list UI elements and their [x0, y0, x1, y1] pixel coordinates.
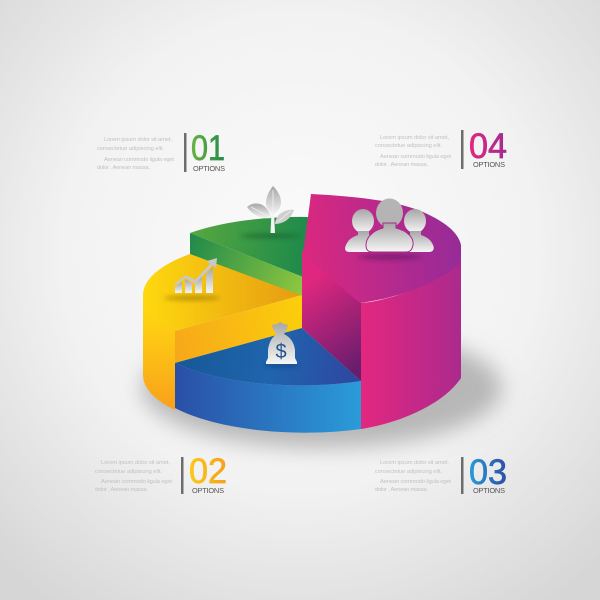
text block 03: dolor . Aenean massa. [375, 487, 428, 493]
text block 04: Lorem ipsum dolor sit amet, [380, 135, 449, 141]
dollar sign: $ [275, 341, 287, 363]
text block 04: dolor . Aenean massa. [375, 162, 428, 168]
text block 02 [95, 460, 172, 493]
callout 03 [375, 453, 507, 495]
number 03: 03 [469, 453, 507, 492]
text block 02: Lorem ipsum dolor sit amet, [101, 460, 170, 466]
text block 02: Aenean commodo ligula eget [101, 479, 172, 485]
text block 04: consectetue adipiscing elit. [375, 143, 442, 149]
slice: magenta [302, 194, 461, 429]
icon: plant [240, 186, 300, 238]
options label 01: OPTIONS [193, 164, 225, 173]
text block 04: Aenean commodo ligula eget [380, 154, 451, 160]
3D pie chart [143, 194, 461, 433]
number 04: 04 [469, 127, 507, 166]
callout 02 [95, 452, 227, 495]
slice: green [190, 217, 308, 296]
number 02: 02 [189, 452, 227, 491]
floor shadow [142, 328, 502, 448]
text block 01 [97, 137, 174, 171]
text block 03 [375, 460, 451, 493]
text block 01: Aenean commodo ligula eget [104, 157, 174, 163]
number 01: 01 [191, 129, 225, 168]
text block 01: consectetue adipiscing elit. [97, 146, 164, 152]
icon: growth chart [164, 258, 220, 300]
callout 04 [375, 127, 507, 169]
text block 03: Lorem ipsum dolor sit amet, [380, 460, 449, 466]
text block 02: dolor . Aenean massa. [95, 487, 148, 493]
icon: money bag [263, 322, 299, 367]
callout 01 [97, 129, 225, 173]
text block 01: dolor . Aenean massa. [97, 165, 150, 171]
text block 01: Lorem ipsum dolor sit amet, [104, 137, 172, 143]
options label 02: OPTIONS [192, 486, 224, 495]
slice: blue [175, 328, 361, 433]
icon: people [345, 198, 434, 260]
text block 02: consectetue adipiscing elit. [95, 469, 162, 475]
text block 03: Aenean commodo ligula eget [380, 479, 451, 485]
text block 04 [375, 135, 451, 168]
text block 03: consectetue adipiscing elit. [375, 469, 442, 475]
options label 03: OPTIONS [473, 486, 505, 495]
slice: yellow [143, 254, 302, 410]
options label 04: OPTIONS [473, 160, 505, 169]
